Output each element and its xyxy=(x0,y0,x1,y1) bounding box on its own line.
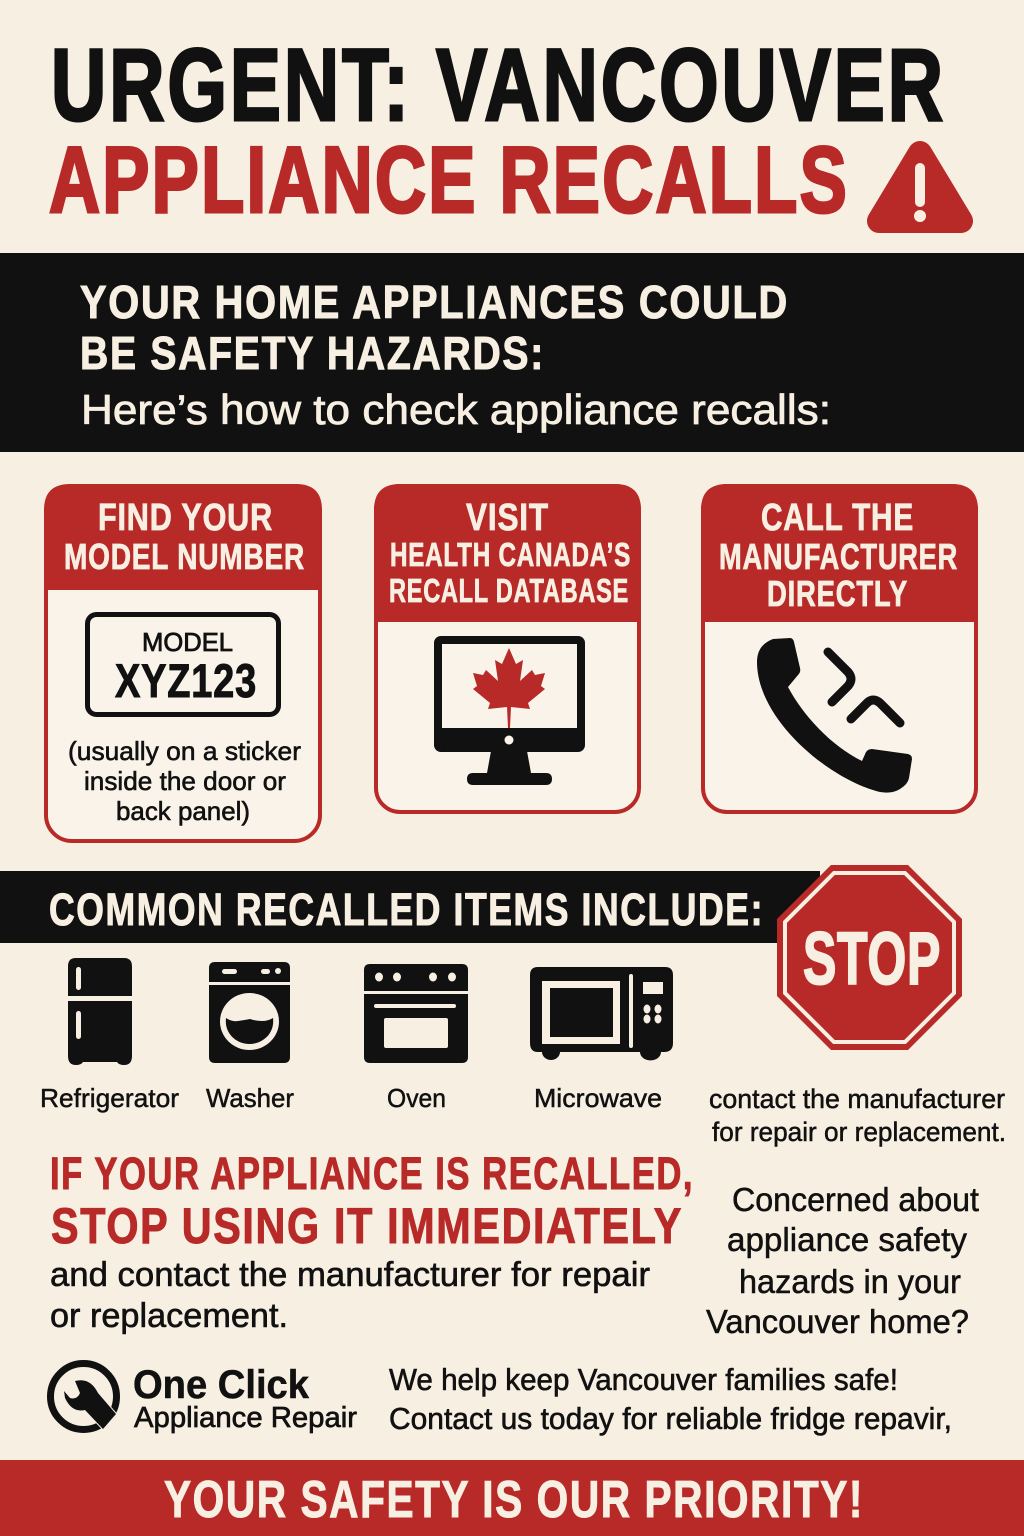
caption: (usually on a sticker xyxy=(68,736,301,766)
stop sign caption xyxy=(709,1084,1006,1147)
wordmark: One Click xyxy=(133,1363,310,1407)
heading: FIND YOUR xyxy=(98,497,273,539)
recall instructions: and contact the manufacturer for repair xyxy=(50,1256,650,1294)
concerned question: Vancouver home? xyxy=(706,1303,969,1340)
icon: warning triangle xyxy=(879,153,961,222)
contact message: Contact us today for reliable fridge repavir, xyxy=(389,1401,952,1436)
caption: inside the door or xyxy=(84,766,286,796)
stop sign caption: for repair or replacement. xyxy=(712,1117,1006,1147)
appliance labels xyxy=(40,1083,662,1113)
icon: telephone handset xyxy=(757,638,912,793)
intro banner: BE SAFETY HAZARDS: xyxy=(80,327,545,379)
contact message xyxy=(389,1362,952,1436)
heading: DIRECTLY xyxy=(767,573,908,614)
heading xyxy=(64,497,305,577)
icon: model plate: MODEL xyxy=(142,627,233,657)
concerned question: hazards in your xyxy=(739,1263,961,1300)
intro banner xyxy=(0,253,1024,452)
recall warning heading: IF YOUR APPLIANCE IS RECALLED, xyxy=(50,1148,694,1199)
recall instructions xyxy=(50,1256,650,1335)
appliance labels: Microwave xyxy=(534,1083,662,1113)
concerned question: Concerned about xyxy=(732,1181,979,1218)
recall warning heading xyxy=(50,1148,694,1254)
icon: wrench in circle xyxy=(50,1364,116,1430)
logo: one click appliance repair xyxy=(50,1363,357,1434)
icon: oven xyxy=(364,964,468,1063)
icon: microwave xyxy=(530,967,673,1060)
icon: model plate xyxy=(88,614,278,714)
heading: VISIT xyxy=(466,497,549,539)
icon: stop sign: STOP xyxy=(803,917,941,1000)
icon: stop sign xyxy=(777,865,962,1050)
icon: monitor with maple leaf xyxy=(434,636,585,785)
concerned question: appliance safety xyxy=(727,1221,967,1258)
contact message: We help keep Vancouver families safe! xyxy=(389,1362,898,1397)
section banner: common recalled items: COMMON RECALLED ITEMS INCLUDE: xyxy=(49,884,764,935)
recall instructions: or replacement. xyxy=(50,1297,288,1335)
footer banner xyxy=(0,1460,1024,1536)
wordmark xyxy=(133,1363,357,1434)
icon: washer xyxy=(209,962,290,1063)
panel: find your model number xyxy=(44,484,322,841)
heading: CALL THE xyxy=(761,497,914,539)
icon: refrigerator xyxy=(68,958,132,1065)
panel: visit health canada's recall database xyxy=(374,484,641,812)
heading: RECALL DATABASE xyxy=(389,572,629,609)
section banner: common recalled items xyxy=(0,871,820,943)
heading: MODEL NUMBER xyxy=(64,536,305,577)
appliance labels: Oven xyxy=(387,1083,446,1113)
caption xyxy=(68,736,301,826)
stop sign caption: contact the manufacturer xyxy=(709,1084,1005,1114)
intro banner: YOUR HOME APPLIANCES COULD xyxy=(80,276,789,328)
icon: model plate: XYZ123 xyxy=(115,654,257,707)
concerned question xyxy=(706,1181,979,1340)
caption: back panel) xyxy=(116,796,250,826)
title xyxy=(49,28,946,232)
recall warning heading: STOP USING IT IMMEDIATELY xyxy=(51,1198,683,1254)
panel: call the manufacturer directly xyxy=(701,484,978,812)
wordmark: Appliance Repair xyxy=(134,1402,357,1434)
intro banner: Here’s how to check appliance recalls: xyxy=(81,386,831,433)
heading xyxy=(719,497,958,614)
appliance labels: Refrigerator xyxy=(40,1083,179,1113)
appliance labels: Washer xyxy=(206,1083,294,1113)
heading: HEALTH CANADA’S xyxy=(390,536,631,573)
heading xyxy=(389,497,631,609)
